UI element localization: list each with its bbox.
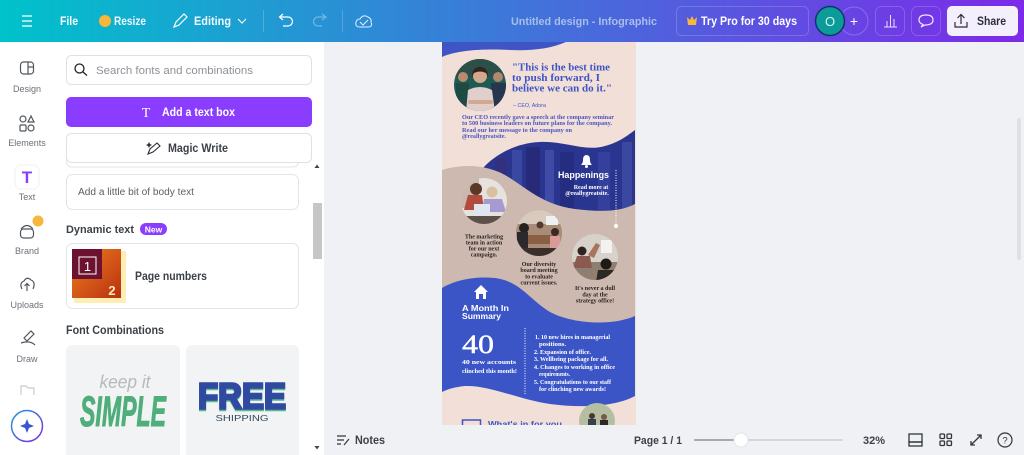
- icon: calendar: [462, 420, 480, 432]
- dotted arrow: [614, 170, 618, 228]
- quote: [512, 62, 612, 94]
- icon: help: [998, 433, 1012, 447]
- summary heading: Summary: [462, 312, 502, 321]
- magic assistant button: [12, 410, 42, 442]
- happenings heading: Happenings: [558, 170, 609, 180]
- magic write button: Magic Write: [168, 143, 228, 155]
- zoom slider: [694, 433, 843, 447]
- happenings text: @reallygreatsite.: [565, 191, 609, 197]
- font card: free shipping: [186, 345, 299, 455]
- font card: free shipping: SHIPPING: [216, 414, 268, 423]
- icon: grid view: [909, 434, 922, 446]
- caption: strategy office: It's never a dull: [575, 286, 615, 292]
- nav: draw: [16, 331, 38, 364]
- taupe wave: [442, 166, 635, 330]
- page background: [442, 42, 636, 426]
- caption: marketing team: team in action: [466, 240, 503, 246]
- icon: undo: [280, 14, 292, 26]
- editing menu: Editing: [194, 16, 231, 28]
- add people circle: [840, 7, 868, 35]
- quote: "This is the best time: [512, 62, 610, 74]
- nav: elements: Elements: [8, 138, 46, 148]
- nav: text selected: [15, 165, 39, 202]
- caption: diversity board: [520, 262, 558, 286]
- quote attribution: – CEO, Adora: [513, 103, 547, 109]
- caption: diversity board: to evaluate: [525, 274, 553, 280]
- comment button: [912, 6, 940, 36]
- dotted divider: [524, 328, 526, 395]
- page numbers card: Page numbers: [135, 271, 207, 283]
- caption: marketing team: for our next: [469, 246, 499, 252]
- nav: design: Design: [13, 84, 41, 94]
- divider: [262, 10, 264, 32]
- summary heading: [462, 304, 509, 321]
- photo: diversity board: [516, 210, 562, 256]
- share button: Share: [977, 16, 1006, 28]
- bottom status bar: [324, 425, 1024, 455]
- quote: believe we can do it.": [512, 84, 612, 94]
- nav: draw: Draw: [16, 354, 38, 364]
- new badge: New: [145, 224, 163, 234]
- photo: strategy office: [572, 234, 618, 282]
- nav: brand: [15, 216, 44, 256]
- canvas background: [324, 42, 1024, 455]
- photo: marketing team: [461, 178, 507, 224]
- icon: menu: [22, 16, 32, 26]
- top wave: [442, 42, 566, 57]
- icon: cloud saved: [356, 16, 372, 27]
- summary blue wave: [442, 277, 635, 406]
- caption: marketing team: campaign.: [471, 252, 498, 258]
- text side panel: [53, 42, 324, 455]
- icon: redo: [314, 14, 326, 26]
- nav: projects folder: [21, 386, 34, 395]
- intro paragraph: to 500 business leaders on future plans for the company.: [462, 121, 613, 127]
- nav: uploads: Uploads: [10, 300, 44, 310]
- file menu: File: [60, 16, 78, 28]
- icon: pages: [940, 434, 952, 446]
- nav: elements: [8, 116, 46, 148]
- summary list: [534, 334, 615, 393]
- icon: fullscreen: [971, 435, 981, 445]
- panel scrollbar: [313, 164, 322, 450]
- intro paragraph: [462, 115, 614, 140]
- new badge: [140, 223, 167, 235]
- dynamic text heading: Dynamic text: [66, 224, 134, 236]
- avatar: [816, 6, 844, 36]
- add a text box button: [66, 97, 312, 127]
- nav: text selected: Text: [19, 192, 36, 202]
- happenings text: Read more at: [574, 185, 608, 191]
- summary list: positions.: [539, 341, 566, 348]
- font combinations heading: Font Combinations: [66, 325, 164, 337]
- nav: uploads: [10, 278, 44, 310]
- nav: design: [13, 62, 41, 94]
- number caption: 40 new accounts: [462, 360, 517, 366]
- share button: [947, 6, 1018, 36]
- add people circle: +: [850, 13, 858, 29]
- try pro button: Try Pro for 30 days: [701, 16, 797, 28]
- subheading preview card: [66, 150, 298, 167]
- caption: marketing team: [465, 234, 503, 258]
- photo: bottom: [579, 403, 615, 425]
- icon: home: [474, 285, 488, 299]
- happenings text: [565, 185, 609, 197]
- add a text box button: T: [142, 106, 151, 121]
- editing menu: [174, 14, 246, 28]
- analytics button: [876, 6, 904, 36]
- icon: notes: [337, 436, 349, 445]
- icon: bell: [581, 155, 592, 168]
- nav: text selected: T: [22, 168, 33, 187]
- add a text box button: Add a text box: [162, 107, 236, 119]
- caption: diversity board: board meeting: [520, 268, 558, 274]
- caption: diversity board: Our diversity: [522, 262, 556, 268]
- search box: [66, 56, 312, 84]
- summary list: for clinching new awards!: [539, 386, 606, 393]
- intro paragraph: @reallygreatsite.: [462, 134, 507, 140]
- what's in for you heading: What's in for you: [488, 419, 562, 429]
- infographic page: [442, 42, 636, 439]
- zoom value: 32%: [863, 435, 885, 447]
- intro paragraph: Our CEO recently gave a speech at the company seminar: [462, 115, 614, 121]
- summary list: requirements.: [539, 371, 570, 378]
- font card: free shipping: FREE: [198, 377, 286, 418]
- big number: 40: [462, 330, 494, 359]
- summary heading: A Month In: [462, 304, 509, 313]
- notes label: Notes: [355, 435, 385, 447]
- caption: marketing team: The marketing: [465, 234, 503, 240]
- happenings city image: [480, 128, 636, 214]
- summary list: 4. Changes to working in office: [534, 364, 615, 371]
- resize menu: Resize: [114, 16, 146, 28]
- left navigation rail: [0, 42, 53, 455]
- page numbers card: [66, 244, 298, 308]
- font card: keep it simple: keep it: [100, 372, 151, 392]
- caption: strategy office: [575, 286, 615, 304]
- thumbnail: [72, 249, 126, 303]
- summary list: 5. Congratulations to our staff: [534, 379, 612, 386]
- top bar: [0, 0, 1024, 42]
- intro paragraph: Read our her message to the company on: [462, 128, 573, 134]
- thumbnail: 1: [84, 259, 91, 274]
- resize menu: [99, 15, 146, 28]
- thumbnail: 2: [108, 283, 116, 298]
- number caption: [462, 360, 517, 375]
- divider: [342, 10, 344, 32]
- caption: strategy office: day at the: [582, 292, 608, 298]
- try pro button: [676, 6, 808, 36]
- summary list: 3. Wellbeing package for all.: [534, 356, 608, 363]
- CEO photo: [454, 59, 506, 112]
- caption: diversity board: current issues.: [521, 280, 558, 286]
- icon: help: ?: [1002, 436, 1008, 446]
- quote: to push forward, I: [512, 73, 600, 84]
- magic write button: [66, 134, 312, 162]
- font card: keep it simple: SIMPLE: [80, 388, 167, 436]
- font card: keep it simple: [66, 345, 180, 455]
- number caption: clinched this month!: [462, 369, 517, 375]
- caption: strategy office: strategy office!: [576, 298, 614, 304]
- avatar: O: [825, 14, 835, 29]
- summary list: 2. Expansion of office.: [534, 349, 591, 356]
- nav: brand: Brand: [15, 246, 39, 256]
- design title: Untitled design - Infographic: [511, 16, 657, 28]
- canvas scrollbar: [1017, 118, 1021, 260]
- page indicator: Page 1 / 1: [634, 435, 682, 447]
- body text card: Add a little bit of body text: [78, 187, 194, 198]
- search box: Search fonts and combinations: [96, 65, 254, 77]
- summary list: 1. 10 new hires in managerial: [535, 334, 610, 341]
- font card: free shipping: FREE: [198, 376, 286, 416]
- body text card: [66, 174, 298, 210]
